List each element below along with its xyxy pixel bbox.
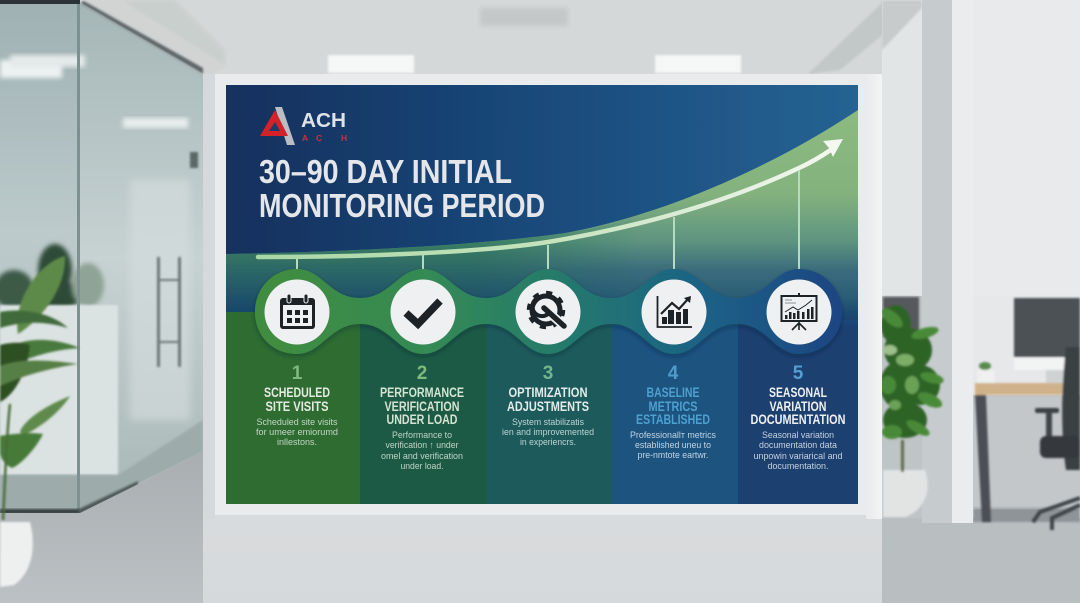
growth arrow: [258, 139, 843, 257]
step 2 text: omel and verification: [381, 450, 463, 461]
step 5 text: SEASONAL: [769, 385, 827, 400]
step 5 text: documentation.: [768, 460, 828, 471]
step 5 text: documentation data: [759, 439, 838, 450]
poster: [226, 85, 858, 504]
glass meeting room: [0, 0, 203, 515]
ceiling: [80, 0, 925, 80]
step 1: icon calendar: [264, 280, 330, 344]
right potted plant: [878, 297, 945, 517]
column backgrounds: [226, 300, 858, 504]
left plant: [0, 256, 80, 520]
title: 30–90 DAY INITIAL: [259, 154, 512, 191]
step 2 text: UNDER LOAD: [386, 412, 458, 427]
step 4 text: 4: [668, 363, 679, 384]
step 4 text: Professionallт metrics: [630, 429, 716, 440]
step 5 text: unpowin variarical and: [754, 450, 842, 461]
step 3 text: System stabilizatis: [512, 416, 584, 427]
title: MONITORING PERIOD: [259, 188, 545, 225]
desk with monitor and chair: [975, 298, 1080, 530]
step 2 text: [380, 363, 464, 471]
step 3 text: ADJUSTMENTS: [507, 399, 589, 414]
step 3 text: 3: [543, 363, 553, 384]
step 2 text: VERIFICATION: [384, 399, 460, 414]
step 4 text: established uneu to: [635, 439, 711, 450]
step 5 text: 5: [793, 363, 804, 384]
left pot: [0, 522, 33, 587]
logo: AC H: [302, 133, 347, 143]
step 5: icon presentation board: [766, 280, 832, 344]
display stand: [203, 74, 882, 603]
step 2 text: under load.: [400, 460, 444, 471]
step 2 text: Performance to: [392, 429, 452, 440]
step 2 text: PERFORMANCE: [380, 385, 464, 400]
step 3 text: OPTIMIZATION: [508, 385, 588, 400]
step 4 text: ESTABLISHED: [636, 412, 710, 427]
rising green wave: [226, 110, 858, 320]
step 1 text: SITE VISITS: [266, 399, 328, 414]
step 4 text: METRICS: [648, 399, 698, 414]
step 5 text: [750, 363, 846, 471]
poster sky background: [226, 85, 858, 504]
step 1 text: for umeer emiorumd: [256, 426, 338, 437]
step 1 text: SCHEDULED: [264, 385, 330, 400]
door handle: [157, 257, 181, 367]
step 1 text: Scheduled site visits: [256, 416, 338, 427]
step 1 text: 1: [292, 363, 303, 384]
milestone stems: [297, 170, 799, 272]
poster frame: [215, 74, 866, 515]
step 3: icon gear and wrench: [516, 280, 580, 344]
step 2: icon check mark: [390, 280, 456, 344]
floor: [0, 452, 203, 603]
step 4 text: pre-nmtote eartwr.: [638, 449, 708, 460]
step 5 text: DOCUMENTATION: [750, 412, 846, 427]
step 4 text: [630, 363, 716, 460]
step 4: icon growth chart: [642, 280, 706, 344]
step 2 text: 2: [417, 363, 427, 384]
title: [259, 154, 545, 225]
logo: ACH: [301, 110, 346, 132]
step 1 text: inllestons.: [277, 436, 317, 447]
blurred plant behind glass: [0, 244, 104, 310]
step 1 text: [256, 363, 338, 447]
step 3 text: ien and improvemented: [502, 426, 594, 437]
step 3 text: in experiencrs.: [520, 436, 576, 447]
timeline connector: [255, 269, 842, 354]
step 2 text: verification ↑ under: [386, 439, 458, 450]
logo: [260, 107, 347, 145]
step 4 text: BASELINE: [646, 385, 700, 400]
step 3 text: [502, 363, 594, 447]
right wall and pillar: [882, 0, 1080, 523]
step 5 text: VARIATION: [770, 399, 826, 414]
step 5 text: Seasonal variation: [762, 429, 834, 440]
